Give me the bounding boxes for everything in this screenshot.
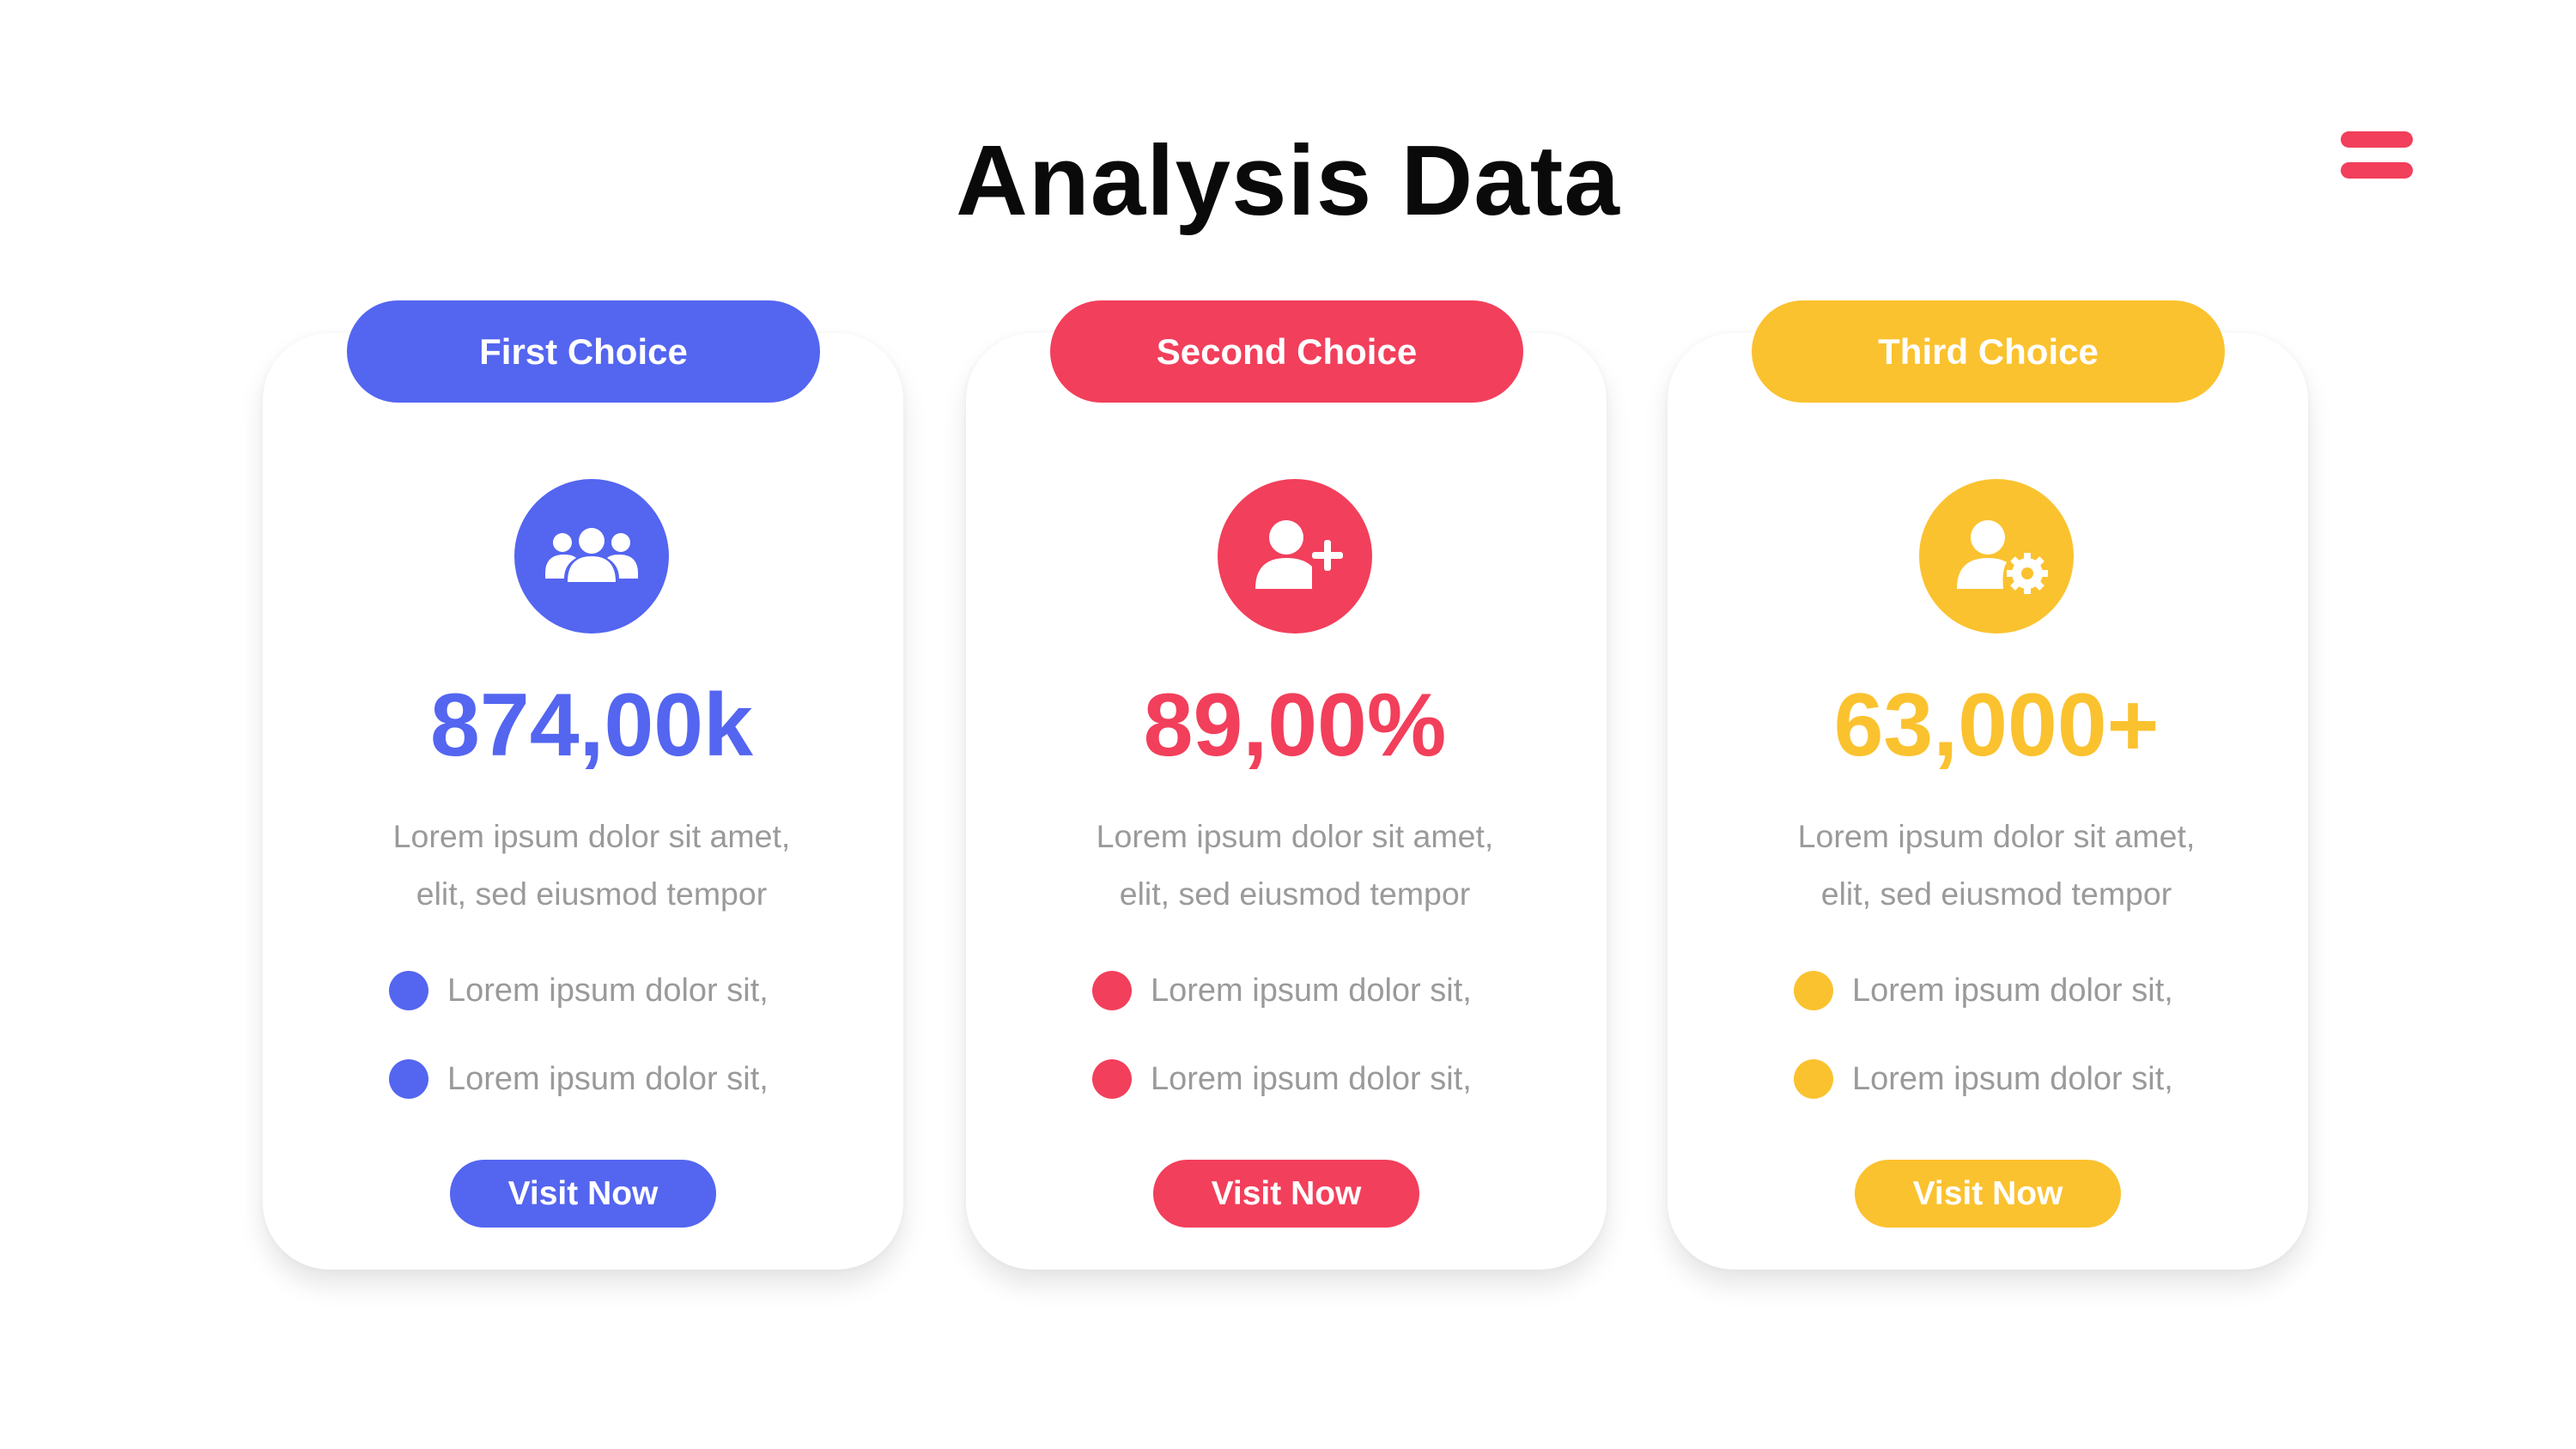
text block: elit, sed eiusmod tempor (1120, 876, 1470, 912)
pill heading (347, 300, 820, 403)
pill heading: Second Choice (1157, 331, 1417, 372)
title: Analysis Data (956, 124, 1620, 236)
button (1153, 1160, 1419, 1228)
text block: elit, sed eiusmod tempor (1821, 876, 2172, 912)
button: Visit Now (508, 1175, 658, 1212)
bullet 2: Lorem ipsum dolor sit, (1852, 1061, 2173, 1097)
number: 89,00% (1144, 676, 1446, 775)
button (1855, 1160, 2121, 1228)
text block: Lorem ipsum dolor sit amet, (1798, 818, 2195, 854)
pill heading: First Choice (479, 331, 688, 372)
icon: user plus (1218, 479, 1372, 634)
bullet 1: Lorem ipsum dolor sit, (1852, 972, 2173, 1008)
bullet 1: Lorem ipsum dolor sit, (447, 972, 769, 1008)
icon: user gear (1919, 479, 2074, 634)
panel: first choice (263, 333, 903, 1270)
text block: elit, sed eiusmod tempor (416, 876, 767, 912)
number: 63,000+ (1834, 676, 2159, 775)
bullet 2: Lorem ipsum dolor sit, (1151, 1061, 1472, 1097)
number: 874,00k (430, 676, 753, 775)
pill heading (1050, 300, 1523, 403)
icon: menu (2341, 131, 2413, 179)
icon: users group (514, 479, 669, 634)
text block: Lorem ipsum dolor sit amet, (1097, 818, 1493, 854)
pill heading: Third Choice (1878, 331, 2099, 372)
text block: Lorem ipsum dolor sit amet, (393, 818, 790, 854)
button: Visit Now (1212, 1175, 1361, 1212)
text block (1798, 818, 2195, 912)
bullet 2: Lorem ipsum dolor sit, (447, 1061, 769, 1097)
panel: third choice (1668, 333, 2308, 1270)
button: Visit Now (1913, 1175, 2063, 1212)
text block (1097, 818, 1493, 912)
bullet 1: Lorem ipsum dolor sit, (1151, 972, 1472, 1008)
panel: second choice (966, 333, 1607, 1270)
button (450, 1160, 716, 1228)
pill heading (1752, 300, 2225, 403)
text block (393, 818, 790, 912)
